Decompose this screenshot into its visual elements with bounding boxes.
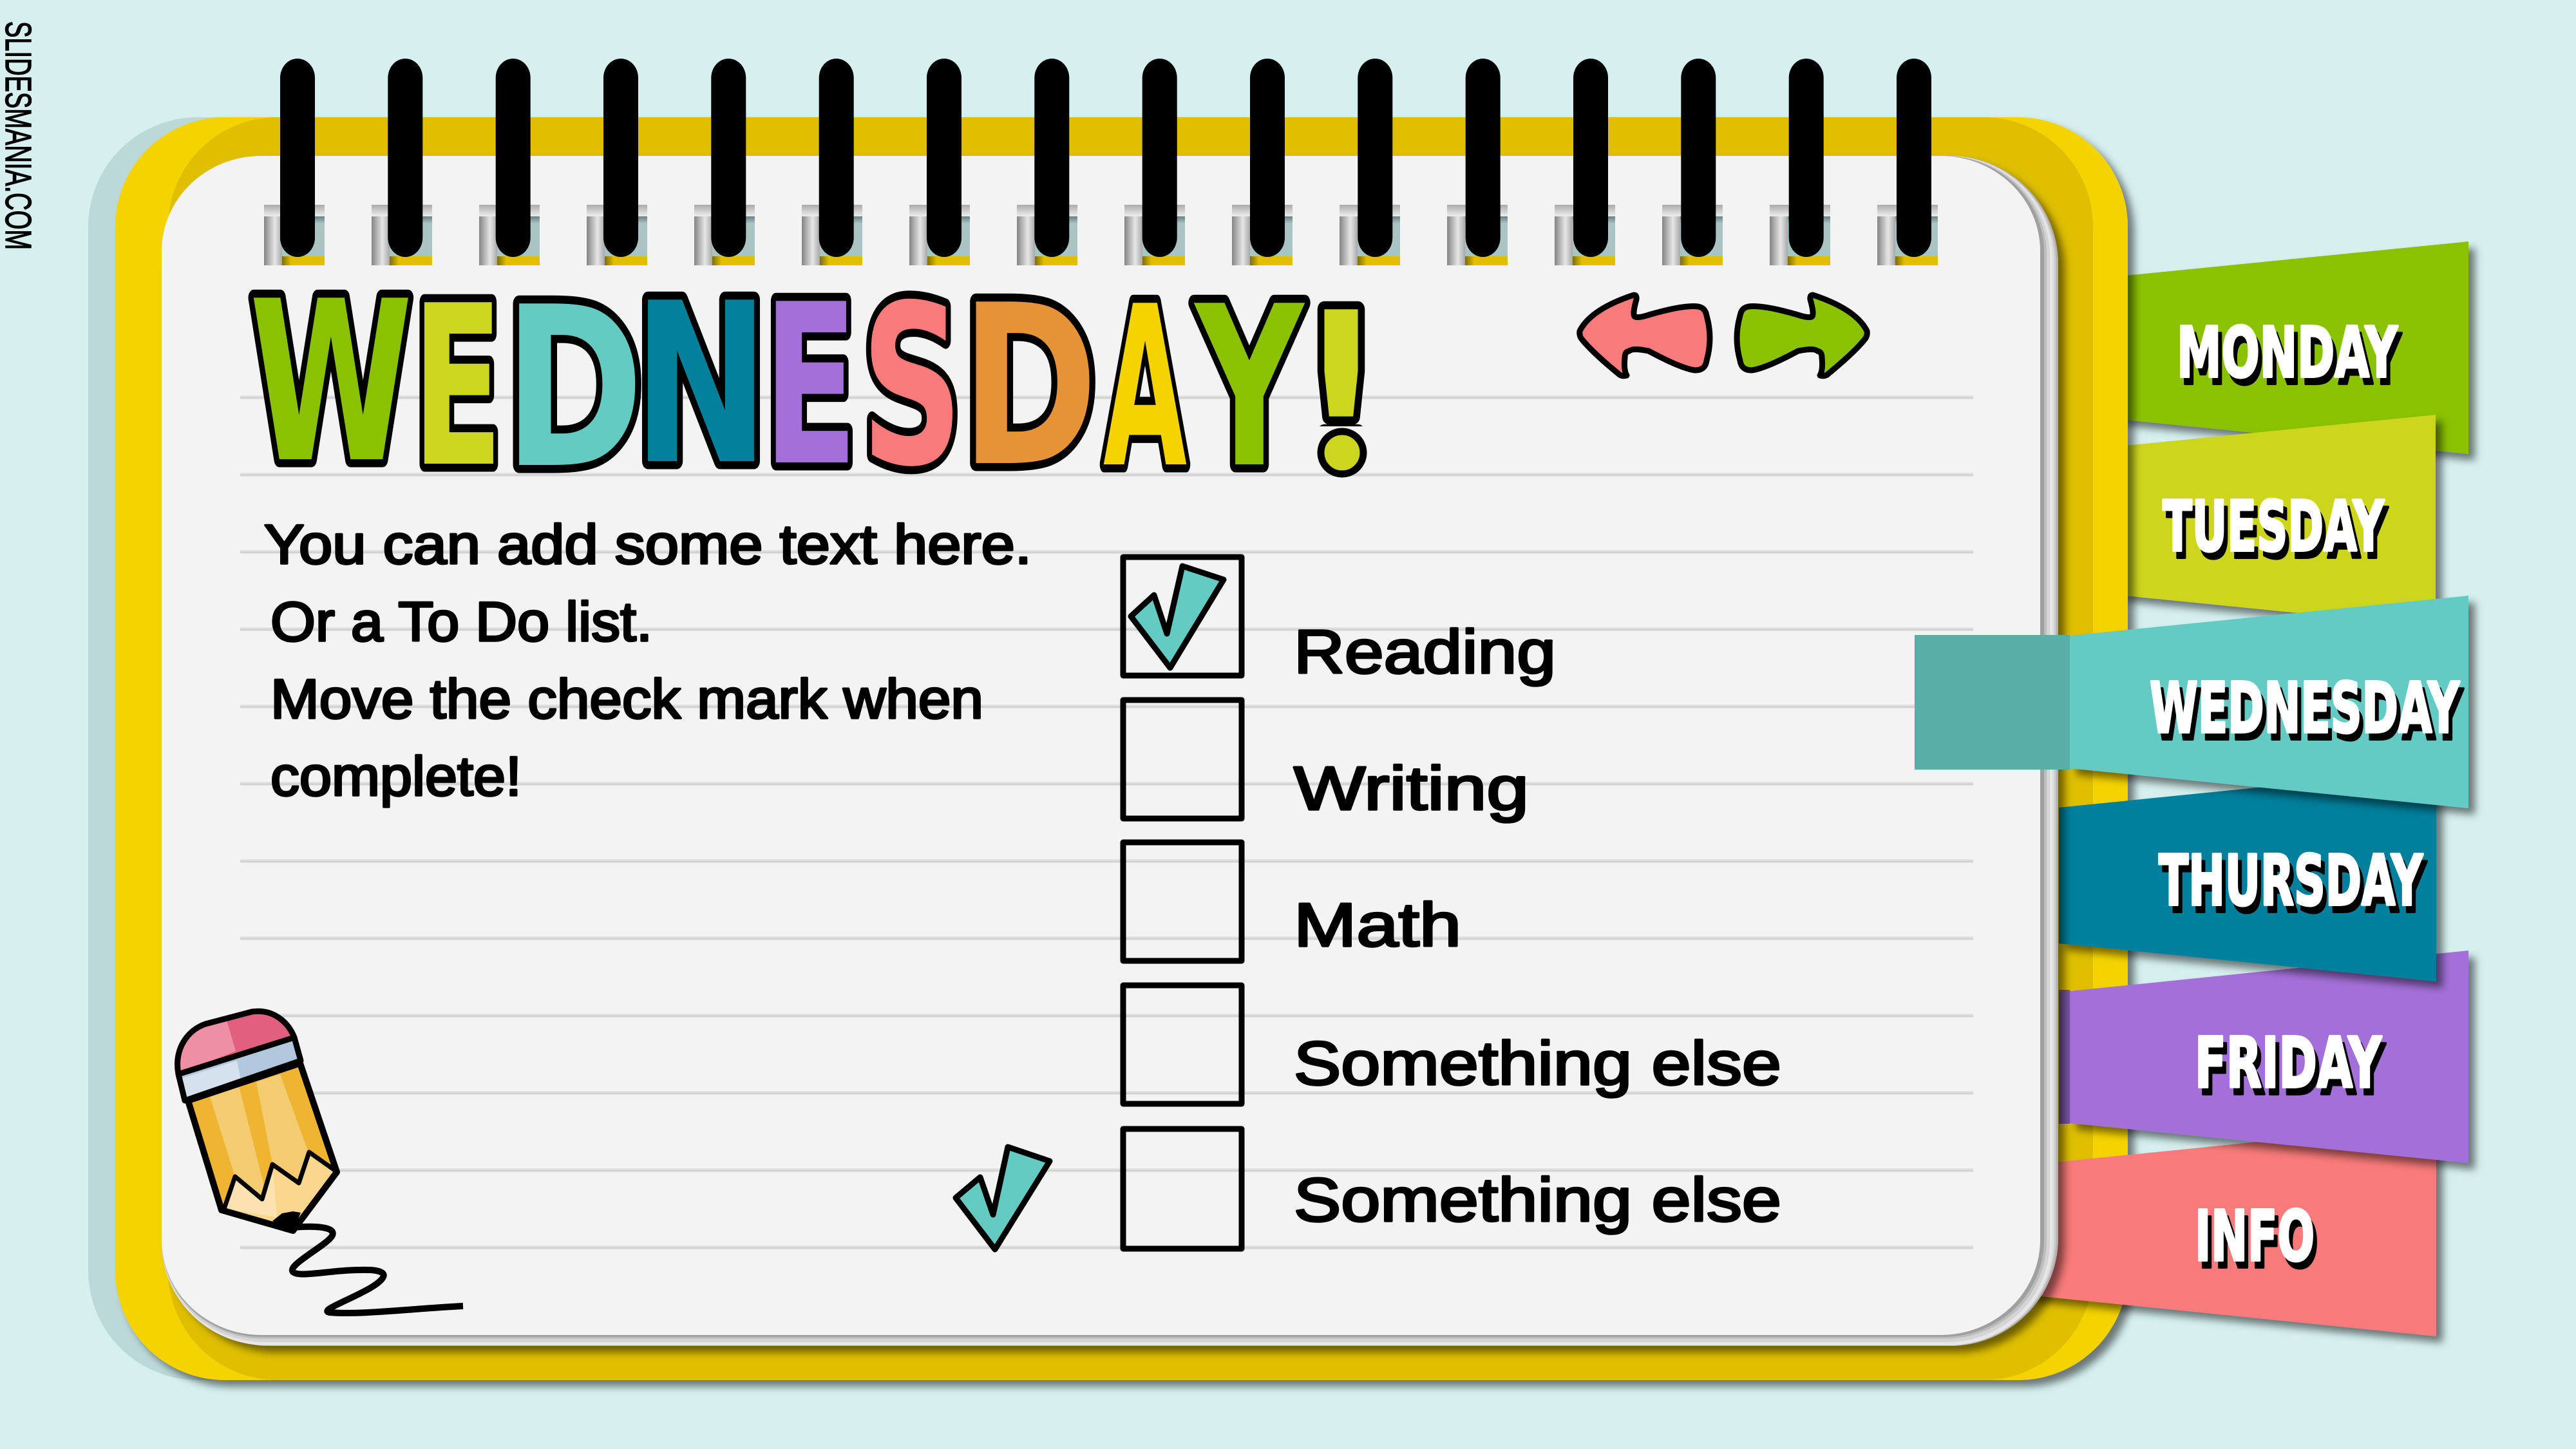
- title: WEDNESDAY!: Y: [1193, 260, 1305, 517]
- tab: Tuesday: TUESDAY: [2163, 487, 2385, 567]
- icon: pencil with squiggle: [178, 1011, 463, 1313]
- title: WEDNESDAY!: [249, 290, 1367, 478]
- tab: Friday: FRIDAY: [2195, 1023, 2382, 1104]
- tab: Info: [2029, 1124, 2436, 1336]
- notebook cover: [115, 117, 2128, 1380]
- title: WEDNESDAY!: D: [961, 258, 1098, 516]
- text block: instructions: Or a To Do list.: [270, 591, 652, 653]
- checklist labels: Something else: [1294, 1029, 1781, 1098]
- icon: spare check mark: [956, 1147, 1050, 1249]
- text block: instructions: complete!: [270, 746, 522, 808]
- tab: Info: INFO: [2195, 1197, 2315, 1277]
- tab: Wednesday (active): [1915, 596, 2468, 808]
- title: WEDNESDAY!: D: [504, 260, 644, 518]
- icon: check mark in first box: [1131, 566, 1224, 668]
- title: WEDNESDAY!: W: [249, 254, 413, 512]
- tab: Monday: [2119, 242, 2468, 454]
- checklist labels: Reading: [1294, 618, 1556, 687]
- checklist labels: Something else: [1294, 1166, 1781, 1235]
- arrow: previous: [1580, 295, 1710, 376]
- text block: instructions: Move the check mark when: [270, 668, 983, 730]
- checklist labels: [1294, 618, 1781, 1235]
- text block: instructions: [264, 514, 1032, 808]
- spiral binding holes: [264, 205, 1938, 265]
- notebook page stack: [162, 156, 2058, 1346]
- title: WEDNESDAY!: A: [1103, 260, 1188, 517]
- title: WEDNESDAY!: N: [633, 256, 769, 514]
- spiral rings: [280, 59, 1931, 257]
- title: WEDNESDAY!: !: [1298, 266, 1385, 524]
- checklist labels: Writing: [1294, 754, 1529, 823]
- checklist labels: Math: [1294, 891, 1461, 960]
- notebook back shadow layer: [88, 117, 410, 1380]
- tab: Thursday: THURSDAY: [2159, 841, 2423, 922]
- tab: Tuesday: [2119, 415, 2436, 627]
- arrow: next: [1737, 295, 1867, 376]
- checklist boxes: [1123, 557, 1242, 1249]
- title: WEDNESDAY!: S: [861, 258, 963, 516]
- text block: instructions: You can add some text here.: [264, 514, 1032, 576]
- tab: Thursday: [2059, 770, 2436, 981]
- tab: Monday: MONDAY: [2177, 313, 2398, 393]
- title: WEDNESDAY!: E: [763, 258, 858, 515]
- tab: Friday: [2059, 951, 2468, 1163]
- title: WEDNESDAY!: E: [412, 259, 503, 516]
